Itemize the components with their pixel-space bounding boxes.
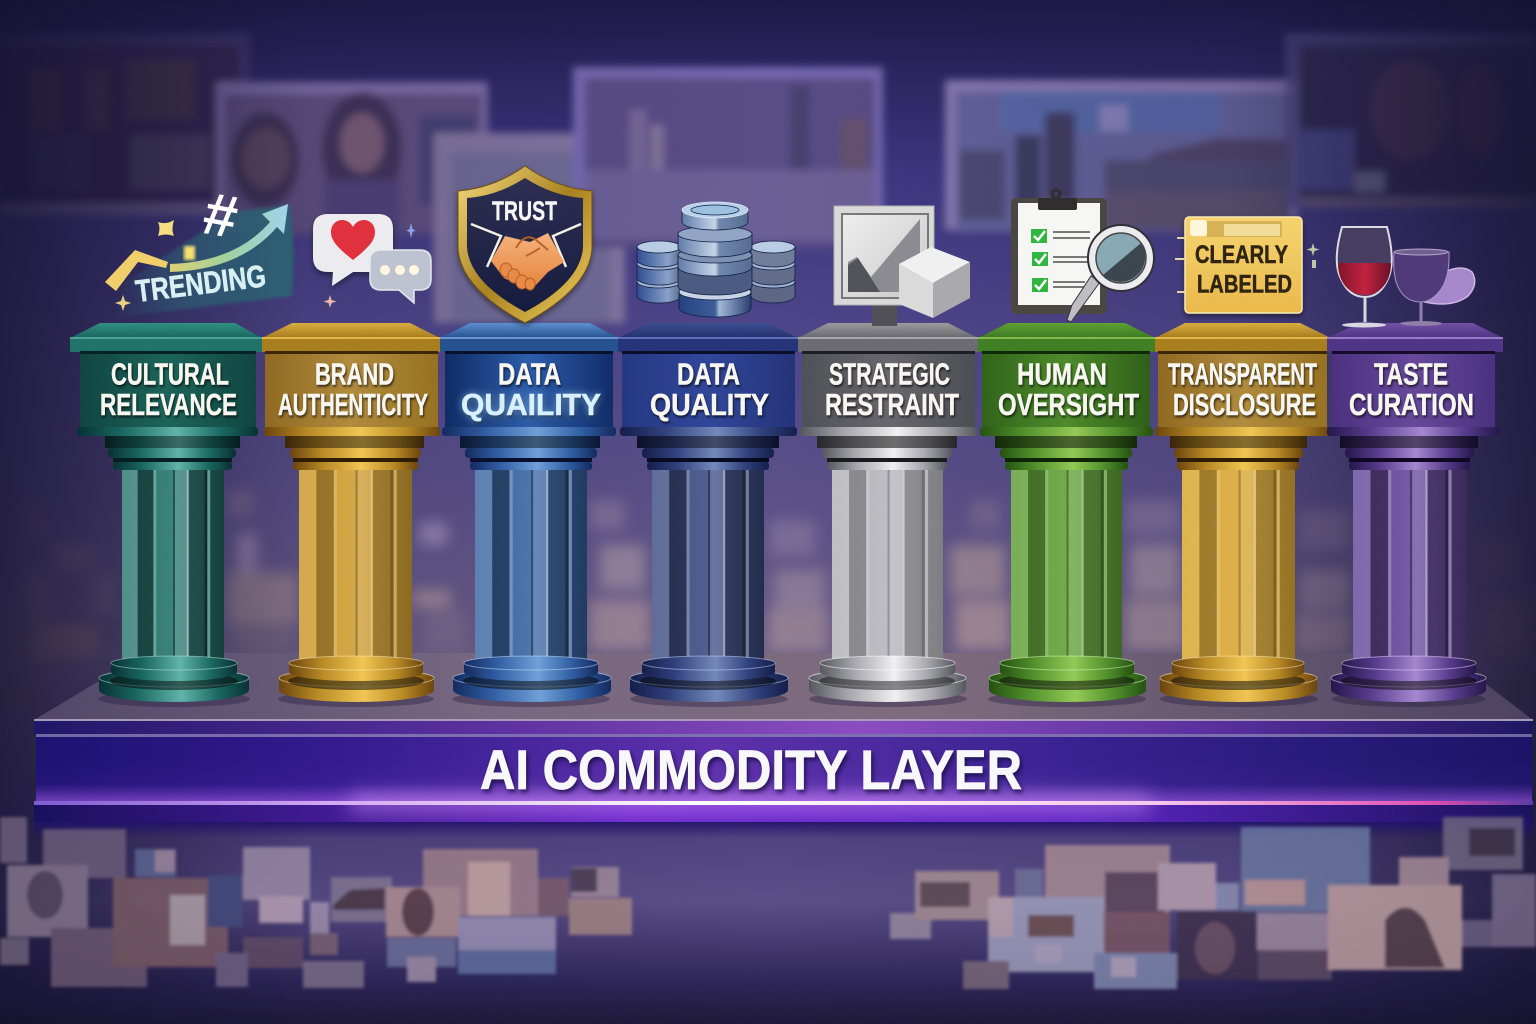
center stack: [678, 202, 752, 317]
trust text: TRUST: [492, 196, 557, 226]
label: QUALITY: [650, 387, 769, 422]
pillar: transparent disclosure: [1155, 323, 1331, 707]
photo frame: dark figures right: [1285, 33, 1536, 208]
photo frame: city right: [945, 80, 1297, 232]
board: [1011, 198, 1107, 314]
label: RESTRAINT: [825, 387, 959, 422]
platform main band: [36, 737, 1532, 804]
sparkle: pink: [324, 295, 336, 308]
capital: [70, 323, 262, 436]
collars: [285, 436, 424, 470]
side ticks: [1175, 238, 1185, 292]
label: QUAILITY: [461, 387, 601, 422]
base: [809, 656, 966, 702]
shaft: [1182, 468, 1295, 662]
label: [278, 356, 428, 422]
pillar: cultural relevance: [70, 323, 262, 707]
label: DATA: [498, 356, 561, 392]
label: DISCLOSURE: [1173, 387, 1316, 422]
label: TASTE: [1374, 356, 1448, 392]
label: RELEVANCE: [100, 387, 237, 422]
capital: [978, 323, 1155, 436]
base: [279, 656, 434, 702]
picture shapes: [848, 219, 920, 292]
teal panel: [112, 205, 294, 318]
label: STRATEGIC: [829, 356, 950, 392]
frame: [834, 206, 934, 305]
gray bubble: [370, 250, 431, 303]
yellow chevron: [105, 250, 168, 291]
label: [650, 356, 769, 422]
label: HUMAN: [1017, 356, 1107, 392]
white bubble: [313, 214, 393, 286]
collars: [1340, 436, 1478, 470]
collars: [995, 436, 1137, 470]
icon: speech bubbles with heart: [313, 214, 431, 303]
sign plate: [1185, 217, 1302, 313]
icon: clearly labeled sign: [1175, 217, 1320, 313]
label: OVERSIGHT: [998, 387, 1139, 422]
monitor stem: [872, 304, 897, 326]
base: [630, 656, 788, 702]
label: [461, 356, 601, 422]
paper: [1018, 203, 1100, 305]
label: DATA: [677, 356, 740, 392]
label: [100, 356, 237, 422]
icon: clipboard and magnifier: [1011, 190, 1154, 322]
blurred photo tiles: lower right: [890, 817, 1536, 989]
blurred mosaic: middle band: [5, 490, 1530, 707]
label: [998, 356, 1139, 422]
capital: [440, 323, 618, 436]
base: [453, 656, 611, 702]
collars: [105, 436, 240, 470]
shaft: [1353, 468, 1467, 662]
clip: [1038, 190, 1077, 210]
hash mark: #: [198, 179, 243, 251]
pillar: strategic restraint: [798, 323, 978, 707]
shaft: [1011, 468, 1122, 662]
platform: AI commodity layer: [34, 653, 1533, 838]
photo frame: city left: [573, 67, 883, 248]
sign text: [1195, 241, 1292, 298]
platform top surface: [34, 653, 1533, 720]
label: [825, 356, 959, 422]
handshake: [471, 224, 581, 290]
blurred photo wall: top: [0, 33, 1536, 323]
wine glass: [1337, 227, 1392, 328]
collars: [1170, 436, 1307, 470]
sheen: [1207, 221, 1282, 237]
icon: trust shield: [458, 166, 592, 323]
photo frame: light interior: [434, 133, 625, 323]
cup handle: [1425, 268, 1475, 304]
photo frame: dark interior left: [0, 33, 250, 215]
base: [99, 656, 249, 702]
label: [1349, 356, 1474, 422]
pillar: brand authenticity: [262, 323, 440, 707]
capital: [618, 323, 798, 436]
capital: [1155, 323, 1331, 436]
collars: [460, 436, 600, 470]
shadow under platform: [34, 822, 1533, 838]
purple cup: [1394, 249, 1449, 326]
blurred photo tiles: lower left: [0, 817, 632, 988]
glow squares: [184, 246, 195, 260]
sign text: LABELED: [1197, 270, 1292, 298]
heading: AI commodity layer: AI COMMODITY LAYER: [480, 738, 1022, 801]
platform lower lip: [34, 804, 1533, 822]
pillar: data quality (trust): [440, 323, 618, 707]
heart: [331, 220, 375, 260]
base: [989, 656, 1146, 702]
shield gold rim: [458, 166, 592, 323]
platform front edge: [34, 719, 1533, 721]
capital: [262, 323, 440, 436]
collars: [817, 436, 957, 470]
checklist: [1031, 229, 1090, 292]
sparkles: [406, 223, 416, 238]
sparkles: [1306, 243, 1320, 268]
label: [1168, 356, 1317, 422]
shaft: [832, 468, 943, 662]
collars: [637, 436, 779, 470]
right stack: [751, 241, 795, 303]
pillar: human oversight: [978, 323, 1155, 707]
icon: database stacks: [637, 202, 795, 317]
icon: wine glass and cup: [1337, 227, 1475, 328]
rising arrow: [170, 204, 288, 272]
glow line: [350, 795, 1150, 811]
dots: [380, 265, 419, 275]
pillar: data quality: [618, 323, 798, 707]
trending text: TRENDING: [134, 258, 268, 309]
shaft: [122, 468, 224, 662]
cube: [899, 247, 970, 318]
base: [1331, 656, 1486, 702]
icon: trending banner: [105, 179, 294, 318]
magnifier: [1067, 225, 1154, 322]
left stack: [637, 241, 681, 303]
label: BRAND: [315, 356, 394, 392]
shaft: [299, 468, 412, 662]
label: CURATION: [1349, 387, 1474, 422]
sparkle: [115, 295, 131, 311]
platform upper strip: [34, 721, 1533, 734]
base: [1160, 656, 1317, 702]
shield interior: [467, 178, 583, 312]
capital: [798, 323, 978, 436]
sign text: CLEARLY: [1195, 241, 1288, 269]
capital: [1327, 323, 1503, 436]
pillar: taste curation: [1327, 323, 1503, 707]
shaft: [475, 468, 587, 662]
icon: image frame and cube: [834, 206, 970, 326]
label: AUTHENTICITY: [278, 387, 428, 422]
shaft: [652, 468, 764, 662]
photo frame: portrait pair: [216, 82, 488, 240]
label: TRANSPARENT: [1168, 356, 1317, 392]
label: CULTURAL: [111, 356, 229, 392]
